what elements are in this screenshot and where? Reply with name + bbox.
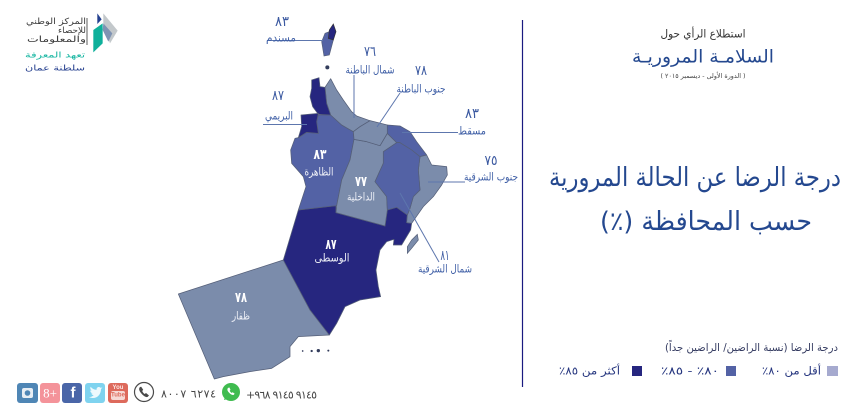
label: South Al Batinah 78: ٧٨ — [415, 63, 427, 79]
region: South Ash Sharqiyah — [407, 155, 447, 223]
logo text: المركز الوطني — [26, 17, 86, 27]
label: North Ash Sharqiyah 81: شمال الشرقية — [418, 262, 472, 276]
icon: youtube: You — [113, 385, 124, 391]
region: Al Buraimi and Madha — [298, 78, 331, 138]
region: Muscat — [387, 125, 427, 157]
legend item: below 80 — [762, 364, 838, 378]
legend item: above 85 — [559, 364, 642, 378]
label: South Ash Sharqiyah 75: ٧٥ — [484, 153, 498, 169]
region: North Ash Sharqiyah — [375, 143, 420, 215]
label: South Ash Sharqiyah 75 — [428, 153, 518, 184]
label: Ad Dhahirah 83 — [304, 147, 334, 178]
map labels — [231, 14, 518, 322]
label: Al Buraimi 87: ٨٧ — [272, 88, 284, 104]
label: Musandam 83: ٨٣ — [275, 14, 289, 30]
region: South Al Batinah — [353, 121, 387, 146]
label: North Al Batinah 76 — [346, 44, 394, 118]
label: Ad Dhahirah 83: ٨٣ — [314, 147, 327, 163]
label: South Al Batinah 78: جنوب الباطنة — [396, 82, 446, 96]
label: Muscat 83 — [402, 106, 486, 138]
label: Muscat 83: مسقط — [458, 124, 486, 138]
icon: whatsapp — [222, 383, 240, 401]
label: Ad Dakhiliyah 77: الداخلية — [347, 190, 375, 204]
icon: phone — [134, 382, 154, 402]
label: Ad Dakhiliyah 77 — [347, 174, 375, 204]
survey intro line: استطلاع الرأي حول — [660, 26, 746, 40]
label: Musandam 83 — [266, 14, 323, 44]
whatsapp number: +٩٦٨ ٩١٤٥ ٩١٤٥ — [246, 388, 317, 402]
legend item: 80 to 85: ٨٠٪ - ٨٥٪ — [661, 364, 719, 378]
label: Muscat 83: ٨٣ — [465, 106, 479, 122]
icon: google plus — [40, 383, 60, 403]
logo text — [25, 17, 87, 72]
logo text: سلطنة عمان — [25, 64, 85, 72]
label: Ad Dakhiliyah 77: ٧٧ — [355, 174, 367, 190]
icon: facebook — [62, 383, 82, 403]
region: Dhofar — [178, 260, 329, 379]
icon: google plus: 8+ — [43, 386, 57, 400]
label: Dhofar 78: ظفار — [231, 310, 250, 322]
region: Al Wusta — [283, 206, 412, 335]
main heading: حسب المحافظة (٪) — [600, 207, 812, 237]
region: North Al Batinah — [325, 79, 370, 132]
icon: youtube: Tube — [111, 392, 126, 398]
logo text: والمعلومات — [27, 35, 86, 45]
main heading — [549, 163, 841, 237]
label: South Ash Sharqiyah 75: جنوب الشرقية — [464, 170, 518, 184]
legend item: above 85: أكثر من ٨٥٪ — [559, 364, 620, 378]
logo: National Centre for Statistics and Information — [25, 13, 118, 72]
region: Ad Dakhiliyah — [336, 133, 397, 226]
legend item: below 80: أقل من ٨٠٪ — [762, 364, 821, 378]
region: Musandam — [322, 24, 336, 56]
label: North Ash Sharqiyah 81 — [400, 193, 472, 276]
label: Ad Dhahirah 83: الظاهرة — [304, 166, 334, 178]
islands — [302, 65, 418, 352]
label: Dhofar 78 — [231, 290, 250, 322]
icon: instagram — [17, 383, 38, 403]
survey name: السلامـة المروريـة — [632, 46, 774, 68]
footer contacts — [17, 382, 317, 403]
logo text: للإحصاء — [58, 26, 86, 36]
map of Oman governorates — [178, 24, 447, 379]
label: Al Buraimi 87: البريمي — [265, 110, 293, 122]
logo mark — [93, 13, 118, 52]
label: Musandam 83: مسندم — [266, 32, 296, 44]
label: Dhofar 78: ٧٨ — [235, 290, 247, 306]
label: Al Wusta 87 — [314, 237, 350, 264]
icon: youtube — [108, 383, 128, 403]
label: South Al Batinah 78 — [377, 63, 446, 127]
region: Ad Dhahirah — [291, 115, 354, 210]
label: North Al Batinah 76: شمال الباطنة — [346, 64, 394, 76]
icon: twitter — [85, 383, 105, 403]
label: Al Buraimi 87 — [263, 88, 307, 124]
label: North Ash Sharqiyah 81: ٨١ — [440, 248, 450, 264]
icon: facebook: f — [70, 384, 76, 402]
legend — [559, 340, 838, 378]
legend title: درجة الرضا (نسبة الراضين/ الراضين جداً) — [665, 340, 838, 354]
label: Al Wusta 87: الوسطى — [314, 252, 350, 264]
survey edition: ( الدورة الأولى - ديسمبر ٢٠١٥ ) — [660, 71, 746, 80]
label: Al Wusta 87: ٨٧ — [326, 237, 337, 253]
toll-free number: ٨٠٠٧ ٦٢٧٤ — [161, 388, 216, 400]
survey header — [632, 26, 774, 80]
logo text: تعهد المعرفة — [25, 50, 85, 60]
label: North Al Batinah 76: ٧٦ — [364, 44, 376, 60]
